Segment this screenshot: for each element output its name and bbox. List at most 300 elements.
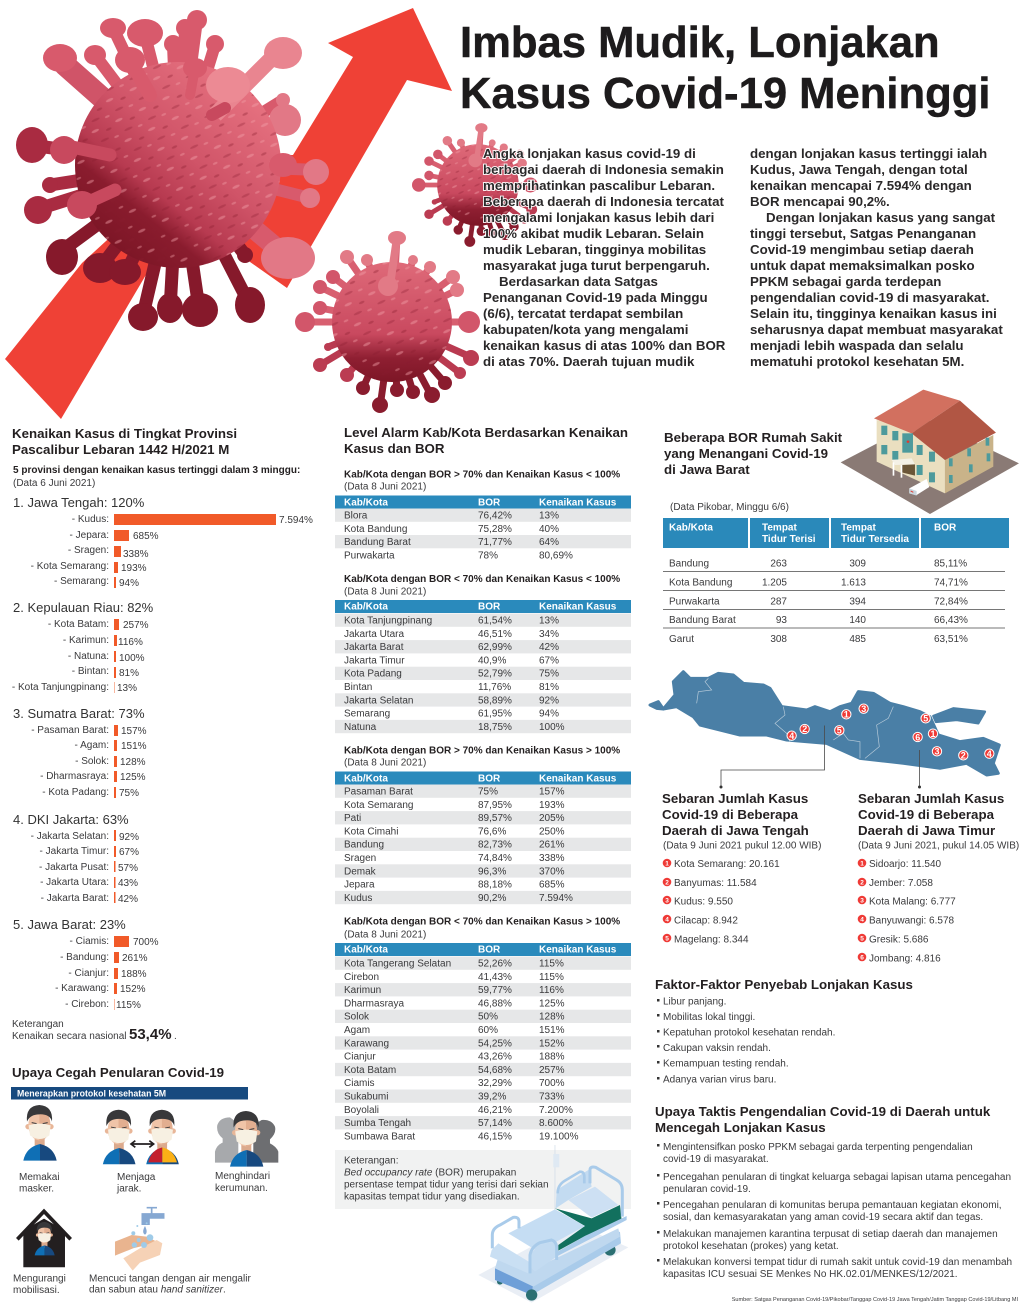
panel: faktor penyebab: Kemampuan testing rendah. [663,1058,789,1070]
table: BOR rumah sakit Jawa Barat: Bandung [669,558,709,570]
label: menjaga jarak: Menjaga [117,1172,156,1183]
table: BOR above 70, cases above 100: Kota Cimahi [344,826,398,837]
subheading: provinsi: 5 provinsi dengan kenaikan kasus tertinggi dalam 3 minggu: [13,465,300,476]
bar chart: Sumatra Barat: 75% [119,788,139,799]
table: BOR above 70, cases above 100: 261% [539,840,565,851]
table: BOR below 70, cases below 100: 52,79% [478,669,512,680]
table: BOR below 70, cases above 100: 700% [539,1078,565,1089]
table: BOR below 70, cases above 100: 128% [539,1012,565,1023]
table: BOR below 70, cases above 100: 54,68% [478,1065,512,1076]
table: BOR above 70, cases below 100: Purwakarta [344,550,395,561]
table: BOR below 70, cases above 100: 41,43% [478,972,512,983]
table: BOR below 70, cases below 100: BOR [478,602,501,612]
subheading: provinsi [13,465,300,489]
table: BOR above 70, cases below 100: 71,77% [478,537,512,548]
table: BOR rumah sakit Jawa Barat: Kab/Kota [669,522,713,534]
label: menghindari kerumunan: Menghindari [215,1171,270,1182]
table: BOR above 70, cases above 100: 157% [539,786,565,798]
text block: intro right column: Dengan lonjakan kasus yang sangat [766,210,996,225]
map number markers: 6 [915,732,920,742]
source credit: Sumber: Satgas Penanganan Covid-19/Pikobar/Tanggap Covid-19 Jawa Tengah/Jatim Tanggap Covid-19/Litbang MI [732,1297,1018,1303]
text block: intro right column: pengendalian covid-19 di masyarakat. [750,290,989,305]
bar chart: Jawa Tengah: - Kudus: [72,514,109,525]
table: BOR above 70, cases below 100: 75,28% [478,524,512,535]
text block: intro left column: (6/6), tercatat terdapat sembilan [483,306,683,321]
table: BOR above 70, cases below 100: 64% [539,537,559,548]
icon: hospital bed [478,1145,628,1303]
bar chart: Kepulauan Riau: 2. Kepulauan Riau: 82% [13,600,154,615]
panel: faktor penyebab: Mobilitas lokal tinggi. [663,1012,755,1023]
note: BOR definition [335,1150,631,1209]
text block: intro right column: menjadi lebih waspada dan selalu [750,338,964,353]
table: BOR above 70, cases below 100 [335,470,631,561]
table: BOR above 70, cases above 100: 74,84% [478,853,512,864]
bar chart: DKI Jakarta: 4. DKI Jakarta: 63% [13,812,129,827]
table: BOR below 70, cases above 100: 115% [539,958,564,970]
bar chart: Sumatra Barat: - Kota Padang: [42,787,109,798]
map number markers: 2 [961,750,966,760]
note: national increase: Kenaikan secara nasional [12,1031,127,1042]
text block: intro left column: kenaikan kasus di atas 100% dan BOR [483,338,726,353]
table: BOR rumah sakit Jawa Barat: 287 [770,596,787,608]
table: BOR below 70, cases above 100: Karimun [344,985,381,996]
bar chart: Sumatra Barat: 157% [121,726,147,737]
text block: intro left column: mengalami lonjakan kasus lebih dari [483,210,714,225]
banner: protokol 5M [11,1087,248,1100]
table: BOR above 70, cases above 100: Sragen [344,853,376,864]
panel: kasus Jawa Tengah: 5 [665,936,669,942]
heading: upaya cegah: Upaya Cegah Penularan Covid-19 [12,1065,224,1080]
map number markers: 3 [861,704,866,714]
table: BOR below 70, cases above 100: Kenaikan Kasus [539,944,617,956]
bar chart: Jawa Barat: - Karawang: [55,983,109,994]
panel: upaya taktis: Mengintensifkan posko PPKM sebagai garda terpenting pengendalian [663,1142,973,1153]
bar chart: Sumatra Barat: 125% [120,772,146,783]
table: BOR above 70, cases above 100 [335,746,631,904]
table: BOR below 70, cases above 100: 733% [539,1092,565,1102]
table: BOR below 70, cases above 100: 43,26% [478,1052,512,1063]
table: BOR below 70, cases above 100: Kab/Kota [344,944,388,956]
panel: faktor penyebab [655,977,913,1086]
table: BOR below 70, cases below 100: Jakarta Selatan [344,695,414,706]
panel: upaya taktis: covid-19 di masyarakat. [663,1154,769,1165]
note: national increase: . [174,1031,177,1042]
panel: kasus Jawa Timur: Kota Malang: 6.777 [869,896,956,908]
panel: kasus Jawa Tengah [662,791,821,946]
bar chart: Jawa Barat: - Ciamis: [70,936,109,947]
panel: kasus Jawa Tengah: Magelang: 8.344 [674,934,749,946]
heading: provinsi [12,426,237,457]
bar chart: Jawa Barat: 700% [133,937,159,948]
panel: kasus Jawa Timur: Daerah di Jawa Timur [858,823,995,838]
bar chart: Kepulauan Riau: - Bintan: [72,666,109,677]
caption: data pikobar: (Data Pikobar, Minggu 6/6) [670,502,789,513]
bar chart: Sumatra Barat: - Dharmasraya: [40,771,109,782]
bar chart: Kepulauan Riau: - Karimun: [63,635,109,646]
bar chart: DKI Jakarta: - Jakarta Timur: [40,846,109,857]
table: BOR rumah sakit Jawa Barat: Kota Bandung [669,578,732,588]
label: mengurangi mobilisasi: mobilisasi. [13,1285,60,1296]
table: BOR above 70, cases above 100: 685% [539,880,565,891]
text block: intro right column: kenaikan mencapai 7.594% dengan [750,178,972,193]
panel: upaya taktis: Melakukan manajemen karantina terpusat di setiap daerah dan manajemen [663,1229,998,1240]
bar chart: Jawa Barat: 115% [116,1000,141,1011]
table: BOR above 70, cases above 100: (Data 8 Juni 2021) [344,758,426,768]
table: BOR above 70, cases above 100: 87,95% [478,800,512,811]
panel: kasus Jawa Tengah: 1 [665,860,669,868]
bar chart: DKI Jakarta [13,812,139,905]
panel: upaya taktis [655,1104,1012,1280]
note: BOR definition: Keterangan: [344,1156,398,1166]
table: BOR below 70, cases below 100: 67% [539,655,559,666]
table: BOR below 70, cases below 100: 81% [539,682,559,693]
table: BOR above 70, cases below 100: 80,69% [539,550,573,561]
note: national increase [12,1019,177,1043]
panel: kasus Jawa Timur: Jember: 7.058 [869,878,933,889]
table: BOR below 70, cases above 100: 115% [539,972,564,983]
map number markers: 4 [987,749,992,759]
table: BOR below 70, cases above 100: Kota Batam [344,1065,396,1076]
table: BOR below 70, cases above 100: Sukabumi [344,1092,388,1102]
text block: intro left column: Beberapa daerah di Indonesia tercatat [483,194,724,209]
table: BOR below 70, cases above 100: Cirebon [344,972,379,983]
table: BOR below 70, cases below 100: Semarang [344,709,390,720]
table: BOR above 70, cases above 100: 7.594% [539,893,573,904]
table: BOR below 70, cases above 100: Solok [344,1012,370,1023]
table: BOR below 70, cases below 100: 58,89% [478,695,512,706]
text block: intro right column: BOR mencapai 90,2%. [750,194,890,209]
table: BOR above 70, cases below 100: 40% [539,524,559,535]
table: BOR above 70, cases above 100: 338% [539,853,565,864]
bar chart: Kepulauan Riau: - Natuna: [68,651,109,662]
table: BOR rumah sakit Jawa Barat: Tidur Tersedia [841,534,909,545]
note: BOR definition: persentase tempat tidur yang terisi dari sekian [344,1180,549,1190]
title: Kasus Covid-19 Meninggi [460,70,990,118]
table: BOR below 70, cases above 100: Boyolali [344,1105,379,1116]
table: BOR below 70, cases above 100: 257% [539,1065,565,1076]
panel: faktor penyebab: Kepatuhan protokol kesehatan rendah. [663,1028,835,1038]
table: BOR rumah sakit Jawa Barat: 66,43% [934,615,968,626]
table: BOR below 70, cases above 100: 46,21% [478,1105,512,1116]
text block: intro right column: dengan lonjakan kasus tertinggi ialah [750,146,987,161]
table: BOR below 70, cases below 100: 94% [539,709,559,720]
text block: intro right column: Covid-19 mengimbau setiap daerah [750,242,974,257]
table: BOR below 70, cases below 100: Kota Padang [344,669,402,680]
table: BOR below 70, cases above 100: 125% [539,998,565,1009]
note: national increase: 53,4% [129,1026,172,1043]
panel: kasus Jawa Timur: Jombang: 4.816 [869,954,941,964]
panel: kasus Jawa Timur: 3 [860,898,864,904]
label: mencuci tangan: dan sabun atau hand sanitizer. [89,1284,226,1296]
note: BOR definition: Bed occupancy rate (BOR) merupakan [344,1168,516,1178]
table: BOR below 70, cases above 100: 7.200% [539,1105,573,1116]
table: BOR below 70, cases below 100: Jakarta Utara [344,629,404,640]
map: Java island [650,672,999,775]
bar chart: DKI Jakarta: 67% [119,847,139,858]
table: BOR above 70, cases below 100: 76,42% [478,510,512,522]
table: BOR below 70, cases below 100: 61,54% [478,616,512,626]
table: BOR below 70, cases above 100: 32,29% [478,1078,512,1089]
bar chart: Jawa Tengah: 1. Jawa Tengah: 120% [13,495,145,510]
panel: kasus Jawa Timur: (Data 9 Juni 2021, pukul 14.05 WIB) [858,840,1019,852]
label: mengurangi mobilisasi: Mengurangi [13,1274,66,1284]
panel: kasus Jawa Timur: 6 [860,954,864,962]
panel: faktor penyebab: Adanya varian virus baru. [663,1074,776,1086]
panel: kasus Jawa Tengah: Kota Semarang: 20.161 [674,859,780,870]
heading: provinsi: Pascalibur Lebaran 1442 H/2021 M [12,442,229,457]
table: BOR above 70, cases above 100: 250% [539,826,565,837]
panel: faktor penyebab: Libur panjang. [663,996,726,1008]
label: menghindari kerumunan [215,1171,270,1194]
table: BOR above 70, cases below 100: 13% [539,510,559,522]
banner: protokol 5M: Menerapkan protokol kesehatan 5M [17,1088,166,1098]
icon: medium virus [295,231,480,413]
label: mengurangi mobilisasi [13,1274,66,1296]
panel: kasus Jawa Timur: Banyuwangi: 6.578 [869,916,955,926]
text block: intro right column: untuk dapat memaksimalkan posko [750,258,975,273]
panel: kasus Jawa Timur: 5 [860,936,864,942]
label: memakai masker [19,1172,60,1194]
table: BOR above 70, cases above 100: 76,6% [478,826,506,837]
table: BOR above 70, cases above 100: 82,73% [478,840,512,851]
table: BOR rumah sakit Jawa Barat: 308 [770,634,787,645]
table: BOR below 70, cases below 100: 18,75% [478,722,512,733]
table: BOR below 70, cases above 100: Cianjur [344,1052,376,1063]
table: BOR below 70, cases above 100: 50% [478,1012,498,1023]
bar chart: Jawa Barat: 152% [120,984,146,995]
table: BOR above 70, cases above 100: 75% [478,786,498,798]
panel: kasus Jawa Tengah: Cilacap: 8.942 [674,916,738,926]
icon: stay at home [17,1211,71,1267]
table: BOR below 70, cases above 100 [335,916,631,1142]
table: BOR below 70, cases above 100: 54,25% [478,1038,512,1049]
bar chart: Jawa Barat: 5. Jawa Barat: 23% [13,917,126,932]
table: BOR below 70, cases above 100: 39,2% [478,1092,506,1102]
table: BOR below 70, cases below 100: (Data 8 Juni 2021) [344,586,426,598]
panel: kasus Jawa Tengah: Kudus: 9.550 [674,896,733,908]
table: BOR rumah sakit Jawa Barat: 1.613 [841,578,866,588]
table: BOR below 70, cases below 100: 11,76% [478,682,511,693]
table: BOR below 70, cases below 100: 75% [539,669,559,680]
table: BOR below 70, cases above 100: Agam [344,1025,370,1036]
table: BOR below 70, cases above 100: 52,26% [478,958,512,970]
table: BOR above 70, cases above 100: 96,3% [478,866,506,877]
table: BOR above 70, cases below 100: Bandung Barat [344,537,411,548]
table: BOR rumah sakit Jawa Barat: Tidur Terisi [762,534,816,545]
text block: intro left column [483,146,726,369]
panel: upaya taktis: Pencegahan penularan di komunitas berupa pemantauan kegiatan ekonomi, [663,1200,1002,1211]
table: BOR above 70, cases above 100: Pati [344,813,361,824]
table: BOR below 70, cases below 100: 100% [539,722,565,733]
table: BOR below 70, cases above 100: Karawang [344,1038,389,1049]
table: BOR rumah sakit Jawa Barat: 93 [776,615,787,626]
table: BOR above 70, cases above 100: Kudus [344,893,372,904]
map number markers: 5 [837,726,842,736]
table: BOR above 70, cases below 100: Kota Bandung [344,524,407,535]
table: BOR rumah sakit Jawa Barat: 85,11% [934,558,967,570]
bar chart: DKI Jakarta: 57% [118,863,138,874]
panel: kasus Jawa Tengah: Sebaran Jumlah Kasus [662,791,808,806]
subheading: provinsi: (Data 6 Juni 2021) [13,478,95,489]
bar chart: Jawa Barat: - Cirebon: [65,999,109,1010]
table: BOR rumah sakit Jawa Barat: 63,51% [934,634,968,645]
table: BOR above 70, cases above 100: Demak [344,866,377,877]
table: BOR above 70, cases above 100: Kab/Kota [344,774,388,784]
bar chart: Kepulauan Riau: - Kota Batam: [48,619,109,630]
bar chart: Jawa Tengah: 7.594% [279,515,313,526]
text block: intro right column: Kudus, Jawa Tengah, dengan total [750,162,968,177]
table: BOR rumah sakit Jawa Barat: Tempat [762,522,797,534]
table: BOR above 70, cases below 100: Kab/Kota dengan BOR > 70% dan Kenaikan Kasus < 100% [344,470,620,480]
table: BOR below 70, cases above 100: 188% [539,1052,565,1063]
panel: faktor penyebab: Cakupan vaksin rendah. [663,1043,771,1054]
panel: kasus Jawa Tengah: 2 [665,880,669,886]
table: BOR below 70, cases below 100: 92% [539,695,559,706]
text block: intro left column: berbagai daerah di Indonesia semakin [483,162,724,177]
table: BOR below 70, cases below 100: 61,95% [478,709,512,720]
table: BOR above 70, cases above 100: 89,57% [478,813,512,824]
bar chart: Jawa Barat: 188% [121,969,147,980]
table: BOR above 70, cases below 100: Kenaikan Kasus [539,498,617,508]
table: BOR rumah sakit Jawa Barat: 394 [849,596,866,608]
bar chart: Kepulauan Riau: 116% [118,637,143,648]
table: BOR below 70, cases above 100: BOR [478,944,501,956]
bar chart: Sumatra Barat: - Solok: [75,756,109,767]
text block: intro right column [750,146,1003,369]
bar chart: Jawa Tengah: - Kota Semarang: [31,561,109,572]
table: BOR above 70, cases above 100: Pasaman Barat [344,786,413,798]
title [460,19,990,118]
map number markers: 1 [930,729,936,739]
text block: intro right column: tinggi tersebut, Satgas Penanganan [750,226,976,241]
panel: kasus Jawa Tengah: Daerah di Jawa Tengah [662,823,809,838]
table: BOR below 70, cases above 100: Kab/Kota dengan BOR < 70% dan Kenaikan Kasus > 100% [344,916,620,928]
label: menjaga jarak [116,1172,156,1194]
bar chart: Jawa Tengah: - Semarang: [54,576,109,587]
table: BOR rumah sakit Jawa Barat: Garut [669,634,694,645]
map number markers: 5 [923,714,928,724]
label: mencuci tangan [89,1274,251,1296]
heading: BOR rumah sakit [664,430,843,477]
label: memakai masker: Memakai [19,1172,60,1183]
panel: kasus Jawa Timur: 4 [860,916,864,924]
leader line: Jawa Timur [918,750,921,788]
bar chart: DKI Jakarta: - Jakarta Pusat: [39,862,109,873]
panel: kasus Jawa Timur: Sebaran Jumlah Kasus [858,791,1004,806]
table: BOR below 70, cases below 100: 34% [539,629,559,640]
table: BOR above 70, cases below 100: BOR [478,498,501,508]
label: mencuci tangan: Mencuci tangan dengan air mengalir [89,1274,251,1284]
bar chart: Kepulauan Riau [12,600,154,694]
bar chart: Sumatra Barat [13,706,147,799]
bar chart: Jawa Tengah: - Sragen: [68,545,109,556]
bar chart: Sumatra Barat: - Pasaman Barat: [31,725,109,736]
label: menjaga jarak: jarak. [116,1184,141,1194]
heading: level alarm: Level Alarm Kab/Kota Berdasarkan Kenaikan [344,425,628,440]
bar chart: Sumatra Barat: - Agam: [75,740,109,751]
table: BOR rumah sakit Jawa Barat: Tempat [841,522,876,534]
panel: kasus Jawa Tengah: Covid-19 di Beberapa [662,807,799,822]
panel: upaya taktis: Upaya Taktis Pengendalian Covid-19 di Daerah untuk [655,1104,991,1119]
table: BOR rumah sakit Jawa Barat: 263 [770,558,787,570]
icon: avoiding crowds [215,1111,278,1167]
leader line: Jawa Tengah [720,726,824,788]
text block: intro right column: PPKM sebagai garda terdepan [750,274,941,289]
icon: small virus behind text [412,123,538,247]
bar chart: Jawa Tengah: 685% [133,531,159,542]
table: BOR below 70, cases above 100: 46,15% [478,1131,512,1142]
panel: faktor penyebab: Faktor-Faktor Penyebab Lonjakan Kasus [655,977,913,992]
table: BOR below 70, cases above 100: 8.600% [539,1118,573,1129]
table: BOR rumah sakit Jawa Barat: Purwakarta [669,596,720,608]
table: BOR above 70, cases above 100: Kab/Kota dengan BOR > 70% dan Kenaikan Kasus > 100% [344,746,620,756]
bar chart: Jawa Tengah: 94% [119,578,139,589]
table: BOR below 70, cases below 100: 40,9% [478,655,506,666]
map number markers: 4 [789,731,794,741]
text block: intro left column: kabupaten/kota yang mengalami [483,322,688,337]
label: menghindari kerumunan: kerumunan. [215,1183,268,1194]
bar chart: Kepulauan Riau: 81% [119,668,139,679]
panel: upaya taktis: Mencegah Lonjakan Kasus [655,1120,826,1135]
bar chart: DKI Jakarta: - Jakarta Utara: [40,877,109,888]
table: BOR below 70, cases above 100: Sumba Tengah [344,1118,411,1129]
panel: upaya taktis: kapasitas ICU sesuai SE Menkes No HK.02.01/MENKES/12/2021. [663,1269,958,1280]
table: BOR above 70, cases below 100: 78% [478,550,498,561]
panel: kasus Jawa Timur: Gresik: 5.686 [869,934,929,946]
text block: intro left column: memprihatinkan pascalibur Lebaran. [483,178,715,193]
icon: keeping distance [103,1110,179,1164]
table: BOR below 70, cases above 100: 59,77% [478,985,512,996]
table: BOR rumah sakit Jawa Barat: 72,84% [934,596,968,608]
panel: kasus Jawa Tengah: 3 [665,898,669,904]
table: BOR below 70, cases below 100: Kenaikan Kasus [539,602,617,612]
bar chart: Jawa Tengah [13,495,313,589]
bar chart: Jawa Tengah: 338% [123,549,149,560]
table: BOR above 70, cases above 100: BOR [478,774,501,784]
panel: kasus Jawa Tengah: 4 [665,916,669,924]
table: BOR below 70, cases above 100: Dharmasraya [344,998,404,1009]
bar chart: Kepulauan Riau: 13% [117,683,137,694]
table: BOR above 70, cases above 100: Kota Semarang [344,800,414,811]
heading: BOR rumah sakit: Beberapa BOR Rumah Sakit [664,430,843,445]
table: BOR below 70, cases above 100: (Data 8 Juni 2021) [344,930,426,940]
bar chart: Kepulauan Riau: 100% [119,653,145,664]
bar chart: Kepulauan Riau: 257% [123,620,149,631]
panel: upaya taktis: sosial, dan kemasyarakatan yang aman covid-19 secara aktif dan tegas. [663,1212,983,1223]
table: BOR above 70, cases above 100: 88,18% [478,880,512,891]
panel: upaya taktis: Melakukan konversi tempat tidur di rumah sakit untuk covid-19 dan menambah [663,1257,1012,1268]
icon: large virus [16,10,329,331]
bar chart: DKI Jakarta: - Jakarta Selatan: [31,831,109,842]
bar chart: DKI Jakarta: 92% [119,832,139,843]
heading: level alarm: Kasus dan BOR [344,441,445,456]
table: BOR rumah sakit Jawa Barat: BOR [934,522,957,534]
table: BOR rumah sakit Jawa Barat: 309 [849,558,866,570]
panel: kasus Jawa Tengah: Banyumas: 11.584 [674,878,757,889]
table: BOR below 70, cases above 100: Sumbawa Barat [344,1131,415,1142]
text block: intro left column: Angka lonjakan kasus covid-19 di [483,146,696,161]
text block: intro left column: Penanganan Covid-19 pada Minggu [483,290,708,305]
icon: masked person [23,1105,57,1161]
table: BOR rumah sakit Jawa Barat: 1.205 [762,578,787,588]
heading: level alarm [344,425,628,456]
bar chart: DKI Jakarta: 42% [118,894,138,905]
table: BOR above 70, cases above 100: 193% [539,800,565,811]
table: BOR above 70, cases above 100: 370% [539,866,565,877]
map number markers [789,704,992,760]
panel: kasus Jawa Timur: Sidoarjo: 11.540 [869,859,942,870]
text block: intro left column: masyarakat juga turut berpengaruh. [483,258,710,273]
